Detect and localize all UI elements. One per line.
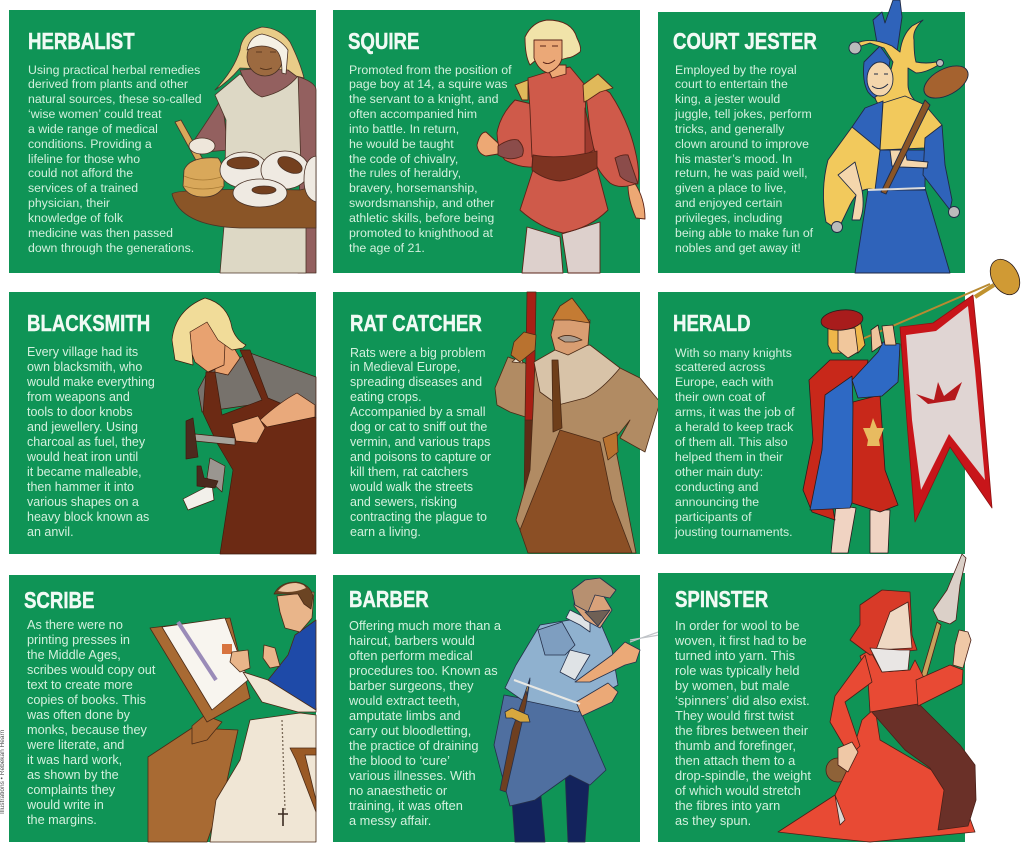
text: scribe description: monks, because they [27,722,147,736]
text: rat catcher description: and sewers, risking [350,495,457,509]
text: scribe description: copies of books. This [27,692,146,706]
heading: scribe: SCRIBE [24,587,94,613]
text: spinster description: They would first twist [675,708,794,722]
text: rat catcher description: in Medieval Europe, [350,360,460,374]
text: herbalist description: a wide range of medical [28,122,158,136]
illustration: barber with scissors and sword [494,578,665,842]
illustration: jester with club [823,0,973,273]
text: spinster description: drop-spindle, the weight [675,768,811,782]
heading: court jester: COURT JESTER [673,28,817,54]
text: herald description: other main duty: [675,465,763,479]
text: scribe description: scribes would copy out [27,662,155,676]
text: blacksmith description: Every village had its [27,344,138,358]
text: scribe description: text to create more [27,678,133,692]
text: court jester description: Employed by the royal [675,63,797,77]
text: blacksmith description: own blacksmith, who [27,360,142,374]
text: spinster description: thumb and forefinger, [675,738,796,752]
text: herbalist description: services of a trained [28,181,138,195]
text: blacksmith description: charcoal as fuel, they [27,435,145,449]
text: herald description: helped them in their [675,450,783,464]
text: scribe description: would write in [27,798,104,812]
text: spinster description: as they spun. [675,812,751,828]
text: court jester description: court to entertain the [675,77,788,91]
text: herbalist description: could not afford the [28,166,133,180]
text: blacksmith description: from weapons and [27,390,130,404]
text: rat catcher description: vermin, and various traps [350,435,490,449]
text: herald description: conducting and [675,480,758,494]
text: rat catcher description: would walk the streets [350,480,473,494]
text: herald description: participants of [675,510,752,524]
text: herald description: arms, it was the job of [675,405,795,419]
text: court jester description [674,63,814,255]
text: blacksmith description: would make everything [27,375,155,389]
text: court jester description: clown around to improve [675,137,809,151]
text: scribe description: the Middle Ages, [27,648,121,662]
heading: barber: BARBER [349,586,429,612]
illustration: herald with trumpet and banner [803,254,1024,553]
text: spinster description: ‘spinners’ did also exist. [675,692,810,708]
illustration: blacksmith hammering [172,298,316,554]
text: spinster description: then attach them to a [675,752,795,768]
text: barber description: various illnesses. With [349,768,476,782]
text: court jester description: being able to make fun of [675,226,813,240]
text: court jester description: return, he was paid well, [675,166,808,180]
text: spinster description: the fibres into yarn [675,798,780,812]
text: herbalist description: derived from plants and other [28,77,188,91]
text: herbalist description: physician, their [28,196,110,210]
heading: squire: SQUIRE [348,28,419,54]
text: barber description: Offering much more than a [349,618,501,632]
text: barber description: the practice of draining [349,738,478,752]
text: squire description: he would be taught [349,137,454,151]
heading: herbalist: HERBALIST [28,28,135,54]
text: barber description: would extract teeth, [349,692,460,708]
text: herald description: their own coat of [675,390,765,404]
text: squire description: into battle. In return, [349,122,459,136]
text: court jester description: and enjoyed certain [675,196,782,210]
text: spinster description: by women, but male [675,678,790,692]
text: blacksmith description: tools to door knobs [27,405,133,419]
text: rat catcher description: spreading diseases and [350,375,482,389]
text: barber description: the blood to ‘cure’ [349,752,450,768]
text: barber description: carry out bloodletting, [349,722,471,738]
panel: herald [658,292,965,554]
heading: rat catcher: RAT CATCHER [350,310,482,336]
text: barber description: haircut, barbers would [349,632,475,648]
text: herald description: scattered across [675,360,765,374]
text: scribe description [27,618,156,826]
text: herald description: of them all. This also [675,435,788,449]
text: squire description: page boy at 14, a squire was [349,77,507,91]
text: barber description: barber surgeons, they [349,678,474,692]
panel: squire [333,10,640,273]
panel: herbalist [9,10,316,273]
text: scribe description: was often done by [27,708,130,722]
text: barber description: often perform medical [349,648,473,662]
text: blacksmith description: would heat iron until [27,450,138,464]
text: scribe description: As there were no [27,618,123,632]
text: spinster description: role was typically held [675,662,799,678]
text: herbalist description [28,63,202,255]
text: court jester description: his master’s mood. In [675,152,792,166]
text: herald description [674,346,795,539]
text: squire description [349,63,512,255]
text: rat catcher description: earn a living. [350,525,421,539]
illustration: monk scribe at desk [148,582,316,842]
text: court jester description: given a place to live, [675,181,786,195]
text: herald description: Europe, each with [675,375,773,389]
text: rat catcher description: kill them, rat catchers [350,465,468,479]
illustration: herbalist woman with tray [172,27,316,273]
illustration: woman with drop spindle [778,554,976,842]
panel: scribe [9,575,316,842]
text: herbalist description: natural sources, these so-called [28,92,202,106]
text: herbalist description: down through the generations. [28,241,194,255]
text: scribe description: printing presses in [27,632,130,646]
text: herald description: jousting tournaments. [675,525,793,539]
text: spinster description: woven, it first had to be [675,632,807,648]
text: herald description: a herald to keep track [675,420,793,434]
text: squire description: promoted to knighthood at [349,226,493,240]
text: barber description: a messy affair. [349,812,431,828]
panel: blacksmith [9,292,316,554]
text: court jester description: nobles and get away it! [675,241,801,255]
text: spinster description: In order for wool to be [675,618,799,632]
heading: herald: HERALD [673,310,751,336]
text: herbalist description: ‘wise women’ could treat [28,107,162,121]
text: court jester description: juggle, tell jokes, perform [675,107,812,121]
text: scribe description: complaints they [27,782,115,796]
text: barber description: amputate limbs and [349,708,461,722]
text: herbalist description: conditions. Providing a [28,137,152,151]
text: blacksmith description: various shapes on a [27,495,139,509]
text: herald description: With so many knights [675,346,792,360]
text: barber description: procedures too. Known as [349,662,498,678]
text: squire description: bravery, horsemanship, [349,181,478,195]
heading: spinster: SPINSTER [675,586,768,612]
text: scribe description: the margins. [27,812,97,826]
text: blacksmith description [27,344,155,539]
text: scribe description: as shown by the [27,768,119,782]
text: scribe description: it was hard work, [27,752,122,766]
illustration: squire in red tunic [477,20,645,273]
text: court jester description: tricks, and generally [675,122,784,136]
text: court jester description: privileges, including [675,211,782,225]
text: blacksmith description: heavy block known as [27,510,149,524]
illustration: rat catcher with pole [495,292,660,553]
text: spinster description: turned into yarn. This [675,648,795,662]
text: rat catcher description: and poisons to capture or [350,450,491,464]
text: spinster description [675,618,811,828]
text: barber description [349,618,501,828]
text: rat catcher description: dog or cat to sniff out the [350,420,487,434]
text: rat catcher description: eating crops. [350,390,422,404]
text: scribe description: were literate, and [27,738,124,752]
panel: rat catcher [333,292,640,554]
text: barber description: training, it was often [349,798,463,812]
text: barber description: no anaesthetic or [349,782,447,798]
text: squire description: the code of chivalry, [349,152,458,166]
text: spinster description: of which would stretch [675,782,801,798]
text: herbalist description: medicine was then passed [28,226,173,240]
heading: blacksmith: BLACKSMITH [27,310,150,336]
text: herbalist description: knowledge of folk [28,211,123,225]
panel: barber [333,575,640,842]
text: squire description: often accompanied him [349,107,477,121]
text: rat catcher description: Accompanied by a small [350,405,485,419]
panel: spinster [658,573,965,842]
text: rat catcher description [350,346,491,539]
text: squire description: swordsmanship, and other [349,196,494,210]
text: squire description: Promoted from the position of [349,63,512,77]
text: blacksmith description: then hammer it into [27,480,134,494]
text: squire description: the rules of heraldry, [349,166,461,180]
text: spinster description: the fibres between their [675,722,808,738]
text: squire description: athletic skills, before being [349,211,494,225]
text: herald description: announcing the [675,495,759,509]
text: blacksmith description: an anvil. [27,525,74,539]
text: squire description: the age of 21. [349,241,425,255]
text: squire description: the servant to a knight, and [349,92,498,106]
text: rat catcher description: contracting the plague to [350,510,487,524]
text: herbalist description: Using practical herbal remedies [28,63,200,77]
panel: court jester [658,12,965,273]
text: herbalist description: lifeline for those who [28,152,140,166]
text: rat catcher description: Rats were a big problem [350,346,485,360]
text: court jester description: king, a jester would [675,92,780,106]
text: blacksmith description: and jewellery. Using [27,420,138,434]
text: blacksmith description: it became malleable, [27,465,142,479]
